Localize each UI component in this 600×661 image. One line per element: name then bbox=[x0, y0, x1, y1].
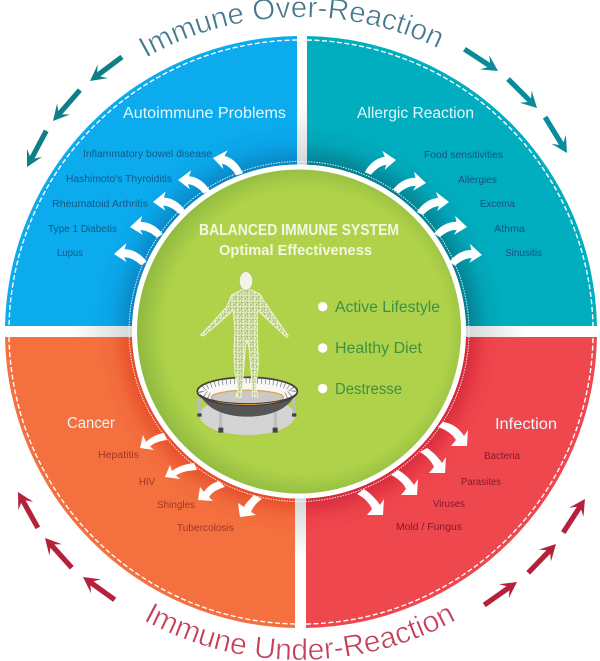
bullet list: lifestyle factors bbox=[318, 299, 440, 398]
heading: Balanced Immune System: BALANCED IMMUNE SYSTEM bbox=[199, 222, 399, 239]
arrows: over-reaction right bbox=[460, 42, 574, 157]
white arrows: cancer bbox=[140, 433, 262, 517]
list: allergic conditions: Sinusitis bbox=[505, 248, 542, 259]
list: autoimmune conditions bbox=[48, 149, 212, 259]
list: allergic conditions: Food sensitivities bbox=[424, 150, 503, 161]
list: infections: Mold / Fungus bbox=[396, 522, 462, 533]
trampoline bbox=[197, 377, 297, 435]
icon: person on trampoline bbox=[197, 272, 297, 435]
panel: balanced immune system centre bbox=[132, 164, 466, 498]
list: allergic conditions bbox=[424, 150, 542, 259]
list: cancer causes: Hepatitis bbox=[98, 450, 139, 461]
heading: Autoimmune Problems: Autoimmune Problems bbox=[123, 105, 286, 122]
white arrows: infection bbox=[357, 422, 468, 515]
subheading: Optimal Effectiveness: Optimal Effectiveness bbox=[219, 242, 372, 259]
list: autoimmune conditions: Inflammatory bowel disease bbox=[83, 149, 212, 160]
list: cancer causes: Shingles bbox=[157, 500, 195, 511]
white arrows: autoimmune bbox=[113, 148, 246, 267]
list: autoimmune conditions: Rheumatoid Arthritis bbox=[52, 199, 148, 210]
list: autoimmune conditions: Lupus bbox=[57, 248, 83, 259]
list: infections bbox=[396, 451, 520, 533]
list: cancer causes bbox=[98, 450, 234, 534]
panel: infection bbox=[306, 337, 597, 628]
list: infections: Parasites bbox=[461, 477, 501, 488]
heading: Allergic Reaction: Allergic Reaction bbox=[357, 105, 474, 122]
panel: cancer bbox=[5, 337, 295, 628]
arrows: over-reaction left bbox=[19, 50, 127, 171]
bullet list: lifestyle factors: Healthy Diet bbox=[335, 340, 423, 357]
list: allergic conditions: Excema bbox=[480, 199, 515, 210]
inner dotted ring bbox=[129, 162, 469, 502]
list: autoimmune conditions: Hashimoto's Thyroiditis bbox=[66, 174, 172, 185]
list: cancer causes: Tubercolosis bbox=[177, 523, 234, 534]
bullet list: lifestyle factors: Active Lifestyle bbox=[335, 299, 440, 316]
list: infections: Viruses bbox=[433, 499, 465, 510]
person figure bbox=[201, 272, 288, 398]
white arrows: allergic bbox=[363, 150, 483, 268]
heading: Cancer: Cancer bbox=[67, 415, 115, 432]
panel: autoimmune problems bbox=[5, 36, 297, 326]
gap shading behind the panels bbox=[60, 60, 540, 600]
list: allergic conditions: Athma bbox=[494, 224, 525, 235]
list: infections: Bacteria bbox=[484, 451, 520, 462]
arrows: under-reaction left bbox=[11, 488, 120, 607]
list: allergic conditions: Allergies bbox=[458, 175, 497, 186]
list: autoimmune conditions: Type 1 Diabetis bbox=[48, 224, 117, 235]
bullet list: lifestyle factors: Destresse bbox=[335, 381, 402, 398]
heading: Infection: Infection bbox=[495, 416, 557, 433]
panel: allergic reaction bbox=[307, 36, 597, 326]
arrows: under-reaction right bbox=[479, 494, 592, 612]
list: cancer causes: HIV bbox=[139, 477, 155, 488]
